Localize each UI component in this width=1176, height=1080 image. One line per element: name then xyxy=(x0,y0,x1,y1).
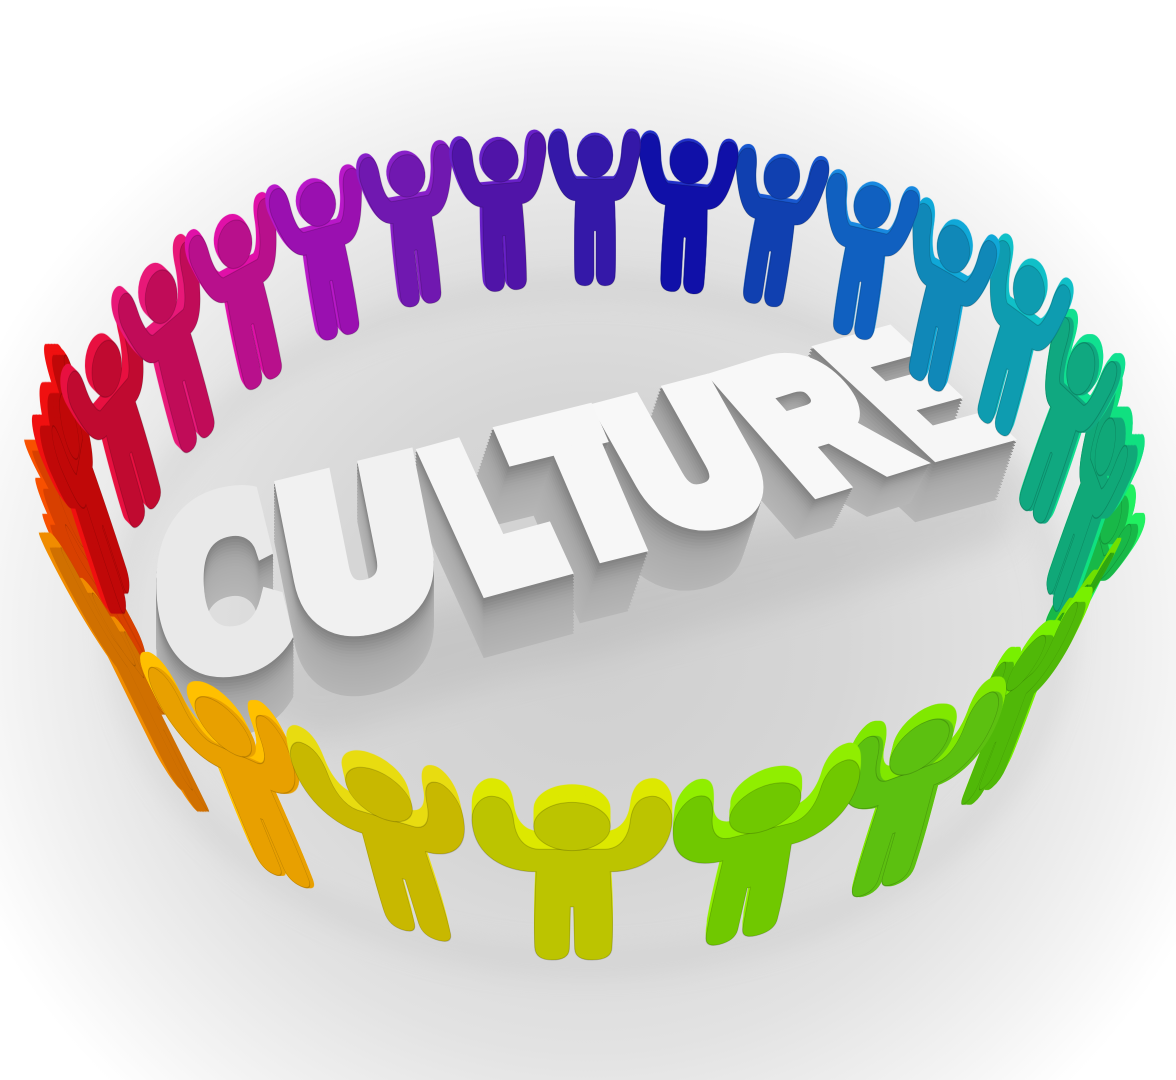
person: blue xyxy=(716,146,831,313)
person: green side xyxy=(982,547,1115,758)
letter R: R xyxy=(685,319,940,524)
3D word: CULTURE xyxy=(156,324,1017,733)
person: indigo xyxy=(548,132,640,286)
letter T: T xyxy=(487,365,699,604)
person: lime green xyxy=(645,756,864,962)
letter C: C xyxy=(151,440,305,726)
person: yellow-green front centre xyxy=(472,796,672,960)
person: crimson xyxy=(64,300,182,556)
person: violet xyxy=(451,132,553,295)
letter U (first): U xyxy=(273,422,447,675)
person: teal xyxy=(954,236,1073,455)
letter U (second): U xyxy=(581,353,795,563)
person: sea green xyxy=(1000,312,1120,542)
person: bright green side xyxy=(930,596,1083,832)
person: yellow xyxy=(285,738,505,960)
letter L: L xyxy=(411,408,574,617)
person: azure xyxy=(805,171,921,348)
person: magenta xyxy=(186,195,307,407)
person: green behind xyxy=(1038,459,1133,677)
person: orange xyxy=(55,539,237,850)
person: amber xyxy=(141,662,355,910)
person: purple-magenta xyxy=(267,166,386,350)
person: orange-red xyxy=(46,445,158,707)
person: purple xyxy=(357,143,468,313)
person: rose xyxy=(115,236,238,476)
letter E: E xyxy=(780,298,1046,490)
person: red xyxy=(51,349,135,645)
person: grass green xyxy=(802,687,1004,918)
person: teal-green xyxy=(1037,379,1129,637)
person: cyan-blue xyxy=(884,199,999,408)
person: deep blue xyxy=(632,132,739,298)
